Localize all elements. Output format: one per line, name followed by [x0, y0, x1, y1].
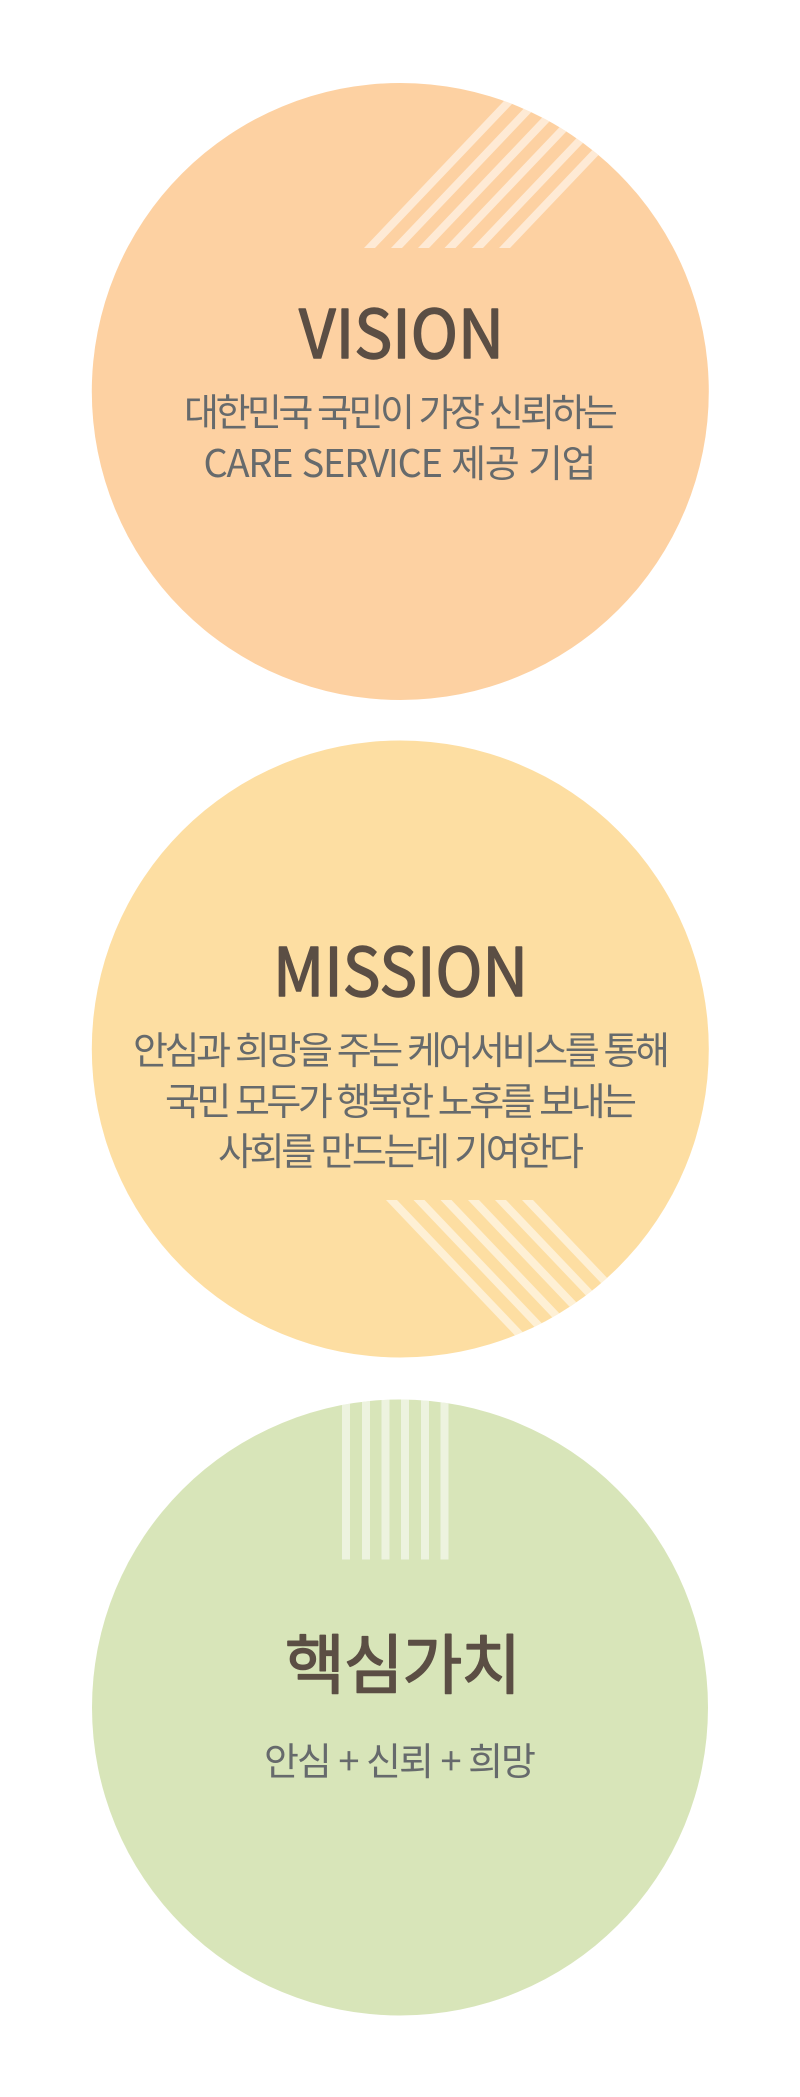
mission text line 2: 국민 모두가 행복한 노후를 보내는 [165, 1071, 637, 1126]
mission heading: MISSION [273, 919, 528, 1016]
mission text line 1: 안심과 희망을 주는 케어서비스를 통해 [133, 1020, 670, 1075]
mission circle [92, 740, 709, 1358]
panel: core values [92, 1390, 708, 2016]
vision heading: VISION [299, 281, 504, 378]
vision diagonal stripes [364, 101, 598, 248]
vision circle [92, 83, 709, 700]
panel: vision [92, 82, 709, 700]
vision text line 2: CARE SERVICE 제공 기업 [204, 433, 596, 488]
vision text line 1: 대한민국 국민이 가장 신뢰하는 [184, 382, 618, 437]
core values vertical stripes [342, 1390, 448, 1560]
core values circle [92, 1400, 708, 2016]
panel: mission [92, 740, 709, 1366]
mission text line 3: 사회를 만드는데 기여한다 [218, 1121, 584, 1176]
mission diagonal stripes [386, 1200, 607, 1336]
core values heading: 핵심가치 [285, 1613, 521, 1707]
core values text: 안심 + 신뢰 + 희망 [264, 1731, 536, 1786]
